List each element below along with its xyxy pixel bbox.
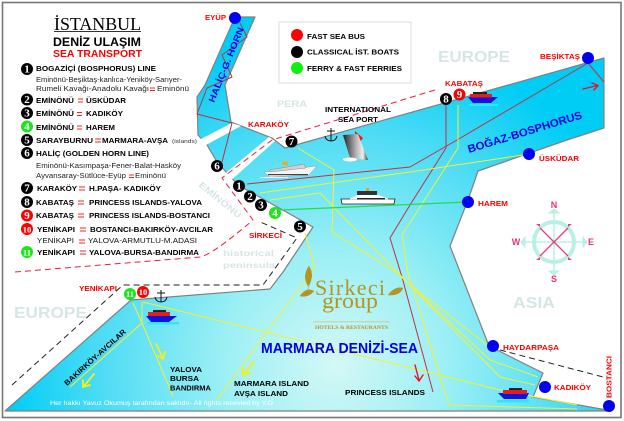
route 6: HALİÇ (GOLDEN HORN LINE) (36, 149, 150, 158)
water body labels (207, 26, 584, 357)
route 7: H.PAŞA- KADIKÖY (89, 184, 161, 193)
route 6 stops (36, 163, 182, 180)
place labels: EYÜP (205, 13, 226, 22)
place labels: KABATAŞ (445, 79, 483, 88)
route 1 (21, 63, 156, 76)
route 9: KABATAŞ (36, 211, 74, 220)
route 11: YENİKAPI (37, 248, 75, 257)
stop markers: 10 (139, 287, 147, 297)
Karaköy bridge (221, 137, 275, 183)
route 5: 5 (24, 134, 30, 146)
continent labels: peninsula (223, 260, 275, 270)
place labels: HAYDARPAŞA (503, 343, 560, 352)
dashed boundaries (12, 89, 607, 385)
route 10: 10 (23, 224, 31, 234)
place labels: KARAKÖY (248, 120, 289, 129)
route 8: KABATAŞ (36, 198, 74, 207)
stop markers: 9 (457, 89, 463, 101)
legend: fast sea bus: FAST SEA BUS (307, 32, 365, 41)
route 7 (21, 182, 161, 194)
route 8: 8 (24, 196, 30, 208)
route 9: PRINCESS ISLANDS-BOSTANCI (89, 211, 210, 220)
legend: ferry: FERRY & FAST FERRIES (307, 64, 402, 73)
route 10: YENİKAPI (37, 225, 75, 234)
route 8: PRINCESS ISLANDS-YALOVA (89, 198, 203, 207)
route list (21, 63, 214, 258)
stop markers: 1 (236, 180, 242, 192)
title: İSTANBUL (54, 14, 141, 34)
destination labels: MARMARA ISLAND (234, 379, 310, 388)
red ferry routes (197, 23, 604, 392)
title: SEA TRANSPORT (53, 49, 142, 60)
stop markers: 2 (247, 191, 253, 203)
route 3: KADIKÖY (86, 109, 123, 118)
stop markers: 7 (289, 136, 295, 148)
route 6 stops: Ayvansaray-Sütlüce-Eyüp (36, 173, 126, 180)
route 11 (21, 246, 200, 258)
route 3 (21, 107, 123, 120)
route 7: 7 (24, 182, 30, 194)
logo: Sirkeci group: Sirkeci (315, 275, 385, 300)
place labels: SİRKECİ (249, 231, 282, 240)
continent labels: PERA (277, 99, 308, 109)
route 2: ÜSKÜDAR (86, 96, 127, 105)
route 1 stops (36, 77, 189, 93)
stop markers: 5 (297, 221, 303, 233)
yellow ferry routes (70, 105, 577, 409)
place labels: ÜSKÜDAR (539, 154, 580, 163)
icon: car ferry (341, 188, 395, 204)
route 1: BOGAZİÇİ (BOSPHORUS) LINE (36, 64, 156, 73)
continent labels: EMİNÖNÜ (197, 180, 243, 220)
route 5: (islands) (172, 139, 197, 145)
stop markers (124, 88, 466, 300)
title: DENİZ ULAŞIM (53, 34, 141, 49)
continent labels: EUROPE (14, 305, 87, 322)
route 4: EMİNÖNÜ (36, 123, 74, 132)
stop markers: 4 (272, 208, 278, 220)
route 11: 11 (23, 248, 31, 258)
route 6 stops: Eminönü (135, 173, 166, 180)
icon: sea bus Kadıköy (497, 388, 529, 402)
route 2: EMİNÖNÜ (36, 96, 74, 105)
place labels (79, 13, 614, 398)
compass: S (551, 274, 557, 284)
icon: sea bus Kabataş (468, 92, 498, 106)
route 9 (21, 210, 210, 222)
destination labels: SEA PORT (338, 115, 378, 124)
destination labels: INTERNATIONAL (325, 105, 391, 114)
route 5: SARAYBURNU (36, 136, 93, 145)
destination labels: PRINCESS ISLANDS (345, 388, 425, 397)
destination labels: AVŞA ISLAND (234, 389, 289, 398)
icon: cruise ship (343, 131, 368, 162)
continent labels: historical (223, 248, 274, 258)
logo: Sirkeci group: group (322, 288, 378, 313)
route 10 second line: YALOVA-ARMUTLU-M.ADASI (88, 236, 197, 245)
stop markers: 8 (443, 94, 449, 106)
route 5 (21, 134, 197, 146)
route 1 stops: Eminönü (157, 86, 189, 93)
route 10: BOSTANCI-BAKIRKÖY-AVCILAR (90, 225, 214, 234)
route 2: 2 (24, 94, 30, 106)
stop markers: 11 (126, 289, 134, 299)
stop markers: 3 (258, 200, 264, 212)
route 10 second line (37, 236, 197, 245)
destination labels: BANDIRMA (170, 384, 212, 392)
continent labels: EUROPE (438, 49, 510, 66)
icon: white passenger ship (260, 162, 317, 178)
copyright note: Her hakkı Yavuz Okumuş tarafından saklıdır- All rights recevied by Y.O (50, 401, 273, 407)
water body labels: MARMARA DENİZİ-SEA (261, 340, 418, 357)
route 7: KARAKÖY (37, 184, 77, 193)
place labels: HAREM (478, 199, 508, 208)
place labels: BOSTANCI (604, 356, 614, 398)
legend (279, 22, 411, 83)
water body labels: HALİÇ-G. HORN (207, 26, 246, 104)
route 10 (21, 223, 214, 235)
route 3: EMİNÖNÜ (36, 109, 74, 118)
Galata bridge (199, 123, 241, 145)
destination labels (62, 105, 425, 398)
direction arrows (83, 83, 598, 387)
icon: anchor port (325, 128, 337, 141)
continent labels (14, 49, 555, 322)
stop markers: 6 (214, 160, 220, 172)
route 10 second line: YENİKAPI (37, 236, 74, 245)
destination labels: YALOVA (170, 365, 203, 374)
route 4: 4 (24, 121, 30, 133)
place labels: YENİKAPI (79, 284, 117, 293)
route 4 (21, 120, 115, 133)
icon: anchor Yenikapı (155, 290, 167, 302)
route 4: HAREM (86, 123, 115, 132)
place labels: KADIKÖY (554, 383, 591, 392)
title (53, 14, 142, 60)
legend: classical boats: CLASSICAL İST. BOATS (307, 48, 399, 56)
compass: W (512, 237, 521, 247)
route 9: 9 (24, 210, 30, 222)
terminal dots (229, 12, 615, 412)
route 1: 1 (24, 64, 30, 76)
route 1 stops: Rumeli Kavağı-Anadolu Kavağı (36, 86, 149, 93)
route 6 (21, 147, 150, 160)
compass: E (588, 237, 594, 247)
logo: Sirkeci group: HOTELS & RESTAURANTS (315, 326, 388, 331)
route 6 stops: Eminönü-Kasımpaşa-Fener-Balat-Hasköy (36, 163, 182, 170)
continent labels: ASIA (513, 295, 555, 312)
destination labels: BURSA (170, 374, 200, 383)
route 1 stops: Eminönü-Beşiktaş-kanlıca-Yeniköy-Sarıyer- (36, 77, 183, 84)
water body labels: BOĞAZ-BOSPHORUS (466, 109, 584, 156)
logo: Sirkeci group (300, 266, 403, 331)
icon: sea bus Yenikapı (146, 310, 179, 324)
route 3: 3 (24, 108, 30, 120)
destination labels: BAKIRKÖY-AVCILAR (62, 327, 128, 387)
route 2 (21, 94, 127, 106)
green ferry route (280, 202, 468, 210)
compass (512, 200, 594, 284)
place labels: BEŞİKTAŞ (540, 52, 580, 61)
route 5: MARMARA-AVŞA (102, 136, 169, 145)
route 6: 6 (24, 148, 30, 160)
compass: N (551, 200, 557, 210)
logo leaves (300, 266, 403, 296)
route 8 (21, 196, 203, 208)
route 11: YALOVA-BURSA-BANDIRMA (89, 248, 200, 257)
